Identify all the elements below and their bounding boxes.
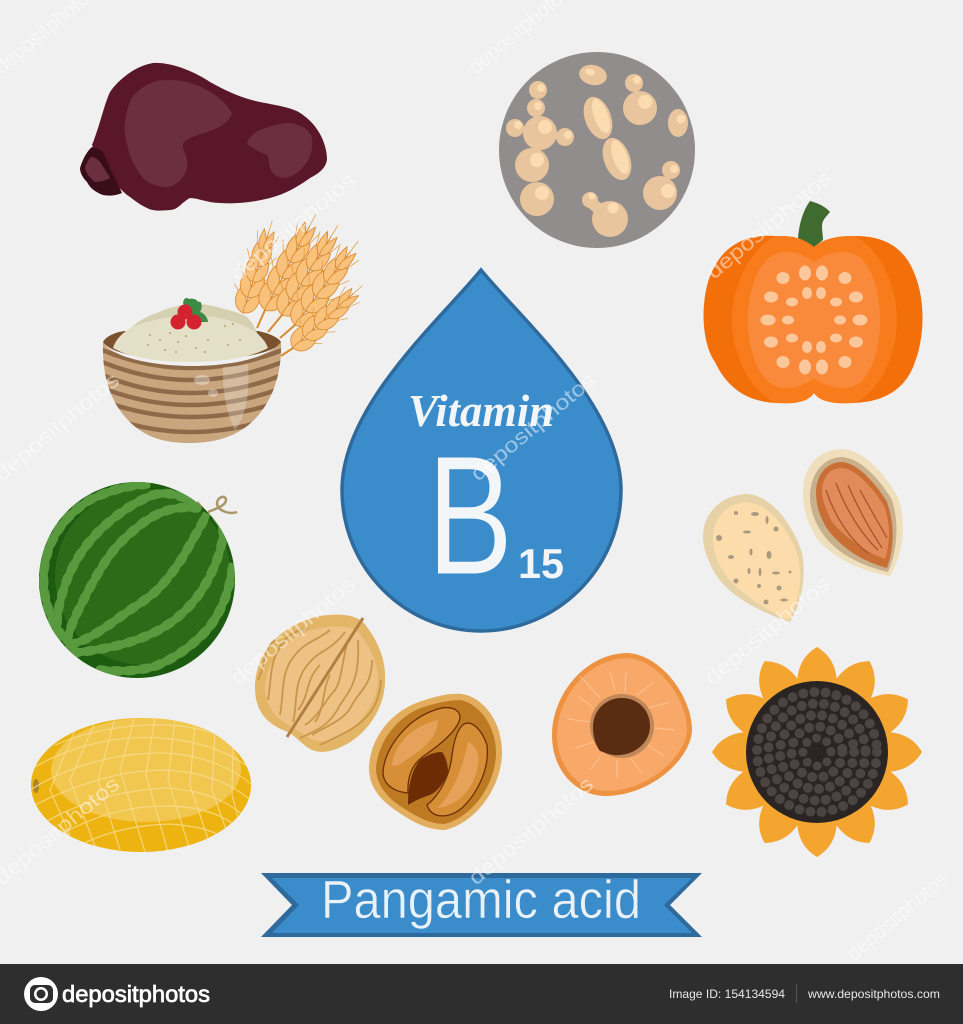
almond: pale kernel bbox=[703, 494, 804, 622]
website: www.depositphotos.com bbox=[807, 987, 940, 1001]
banner: Pangamic acid bbox=[261, 870, 702, 937]
icon: whole nut bbox=[255, 615, 385, 752]
heading: Vitamin: Vitamin bbox=[408, 385, 554, 436]
icon: yeast circle bbox=[499, 52, 695, 248]
icon: logo bbox=[24, 977, 58, 1011]
icon: cracked walnut bbox=[369, 694, 502, 830]
watermarks: depositphotos bbox=[842, 868, 953, 966]
watermarks: depositphotos bbox=[464, 773, 598, 890]
icon: sunflower bbox=[712, 647, 922, 857]
icon: apricot half bbox=[552, 653, 692, 796]
heading: 15: 15 bbox=[518, 540, 564, 587]
pumpkin stem bbox=[798, 201, 830, 247]
watermarks: depositphotos bbox=[466, 369, 600, 486]
icon: liver bbox=[80, 63, 327, 211]
watermarks: depositphotos bbox=[702, 167, 836, 284]
icon: watermelon bbox=[39, 482, 237, 678]
icon: yellow melon bbox=[30, 716, 252, 852]
icon: wheat bbox=[227, 205, 373, 360]
brand name: depositphotos bbox=[62, 981, 210, 1007]
almond: in shell bbox=[803, 449, 903, 576]
banner text: Pangamic acid bbox=[321, 870, 641, 930]
porridge bbox=[113, 304, 268, 362]
icon: porridge bowl bbox=[102, 298, 282, 443]
image id: Image ID: 154134594 bbox=[669, 987, 785, 1001]
bowl body bbox=[102, 342, 282, 443]
melon stem bbox=[197, 497, 237, 521]
icon: almonds bbox=[703, 449, 903, 622]
watermarks: depositphotos bbox=[700, 573, 834, 690]
watermarks: depositphotos bbox=[226, 573, 360, 690]
watermarks: depositphotos bbox=[226, 169, 360, 286]
droplet bbox=[342, 270, 621, 631]
footer bar bbox=[0, 964, 963, 1024]
icon: pumpkin bbox=[704, 201, 922, 403]
heading: B: B bbox=[427, 420, 513, 610]
berries and leaves bbox=[170, 298, 208, 330]
